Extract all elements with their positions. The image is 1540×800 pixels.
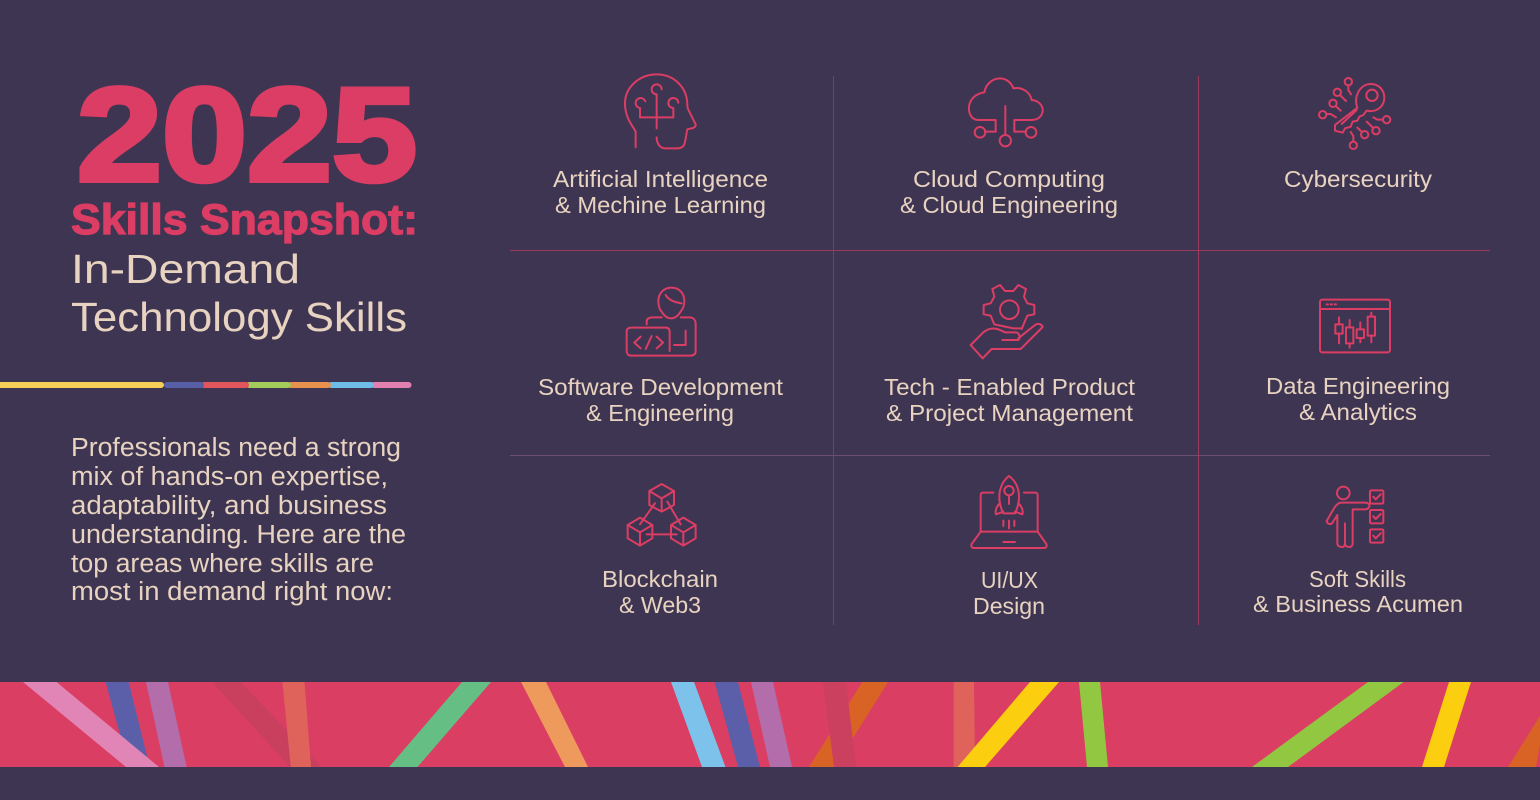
subheading: In-Demand Technology Skills	[71, 246, 407, 340]
intro paragraph: mix of hands-on expertise,	[71, 463, 388, 491]
label	[973, 567, 1045, 619]
skill: UI/UX Design	[971, 476, 1047, 619]
multicolour divider bar	[0, 382, 412, 388]
label: & Engineering	[586, 400, 734, 426]
label: Data Engineering	[1266, 373, 1450, 399]
label	[602, 566, 718, 618]
label: UI/UX	[981, 567, 1038, 593]
title block	[71, 62, 418, 340]
icon: developer with code	[627, 288, 696, 356]
label: & Mechine Learning	[555, 192, 766, 218]
icon: linked cubes	[628, 484, 696, 546]
icon: hand holding gear	[971, 285, 1043, 358]
label: Soft Skills	[1309, 566, 1406, 592]
icon: rocket on laptop	[971, 476, 1047, 548]
label: & Web3	[619, 592, 701, 618]
label: Software Development	[538, 374, 784, 400]
label: Blockchain	[602, 566, 718, 592]
icon: person with checklist	[1327, 487, 1383, 547]
label: Cybersecurity	[1284, 166, 1433, 192]
label: & Project Management	[886, 400, 1134, 426]
subheading: In-Demand Technology Skills: In-Demand	[71, 246, 300, 292]
intro paragraph: adaptability, and business	[71, 492, 387, 520]
label: Tech - Enabled Product	[884, 374, 1136, 400]
label: & Business Acumen	[1253, 591, 1463, 617]
label: Cloud Computing	[913, 166, 1105, 192]
icon: digital key	[1319, 78, 1390, 149]
skill: Blockchain	[602, 484, 718, 618]
skill: Data Engineering	[1266, 300, 1450, 425]
label: Artificial Intelligence	[553, 166, 768, 192]
intro paragraph: top areas where skills are	[71, 550, 374, 578]
heading: Skills Snapshot: Skills Snapshot:	[71, 196, 418, 244]
label	[900, 166, 1118, 218]
label	[884, 374, 1136, 426]
label	[553, 166, 768, 218]
label	[1253, 566, 1463, 617]
subheading: In-Demand Technology Skills: Technology Skills	[71, 294, 407, 340]
intro paragraph	[71, 434, 406, 606]
label	[538, 374, 784, 426]
intro paragraph: understanding. Here are the	[71, 521, 406, 549]
decorative stripe band	[0, 682, 1540, 767]
skill: Cybersecurity	[1284, 78, 1433, 192]
label: Design	[973, 593, 1045, 619]
icon: head with circuit	[625, 74, 696, 148]
skill: Artificial Intelligence	[553, 74, 768, 218]
skill: Cloud Computing	[900, 78, 1118, 218]
label	[1266, 373, 1450, 425]
skill: Product and Project Management	[884, 285, 1136, 426]
title: 2025: 2025	[77, 62, 417, 210]
label: & Analytics	[1299, 399, 1417, 425]
icon: browser with candlestick chart	[1320, 300, 1390, 352]
intro paragraph: most in demand right now:	[71, 578, 393, 606]
skill: Software Development	[538, 288, 784, 426]
icon: cloud network	[969, 78, 1043, 146]
label: & Cloud Engineering	[900, 192, 1118, 218]
intro paragraph: Professionals need a strong	[71, 434, 401, 462]
skill: Soft Skills	[1253, 487, 1463, 617]
